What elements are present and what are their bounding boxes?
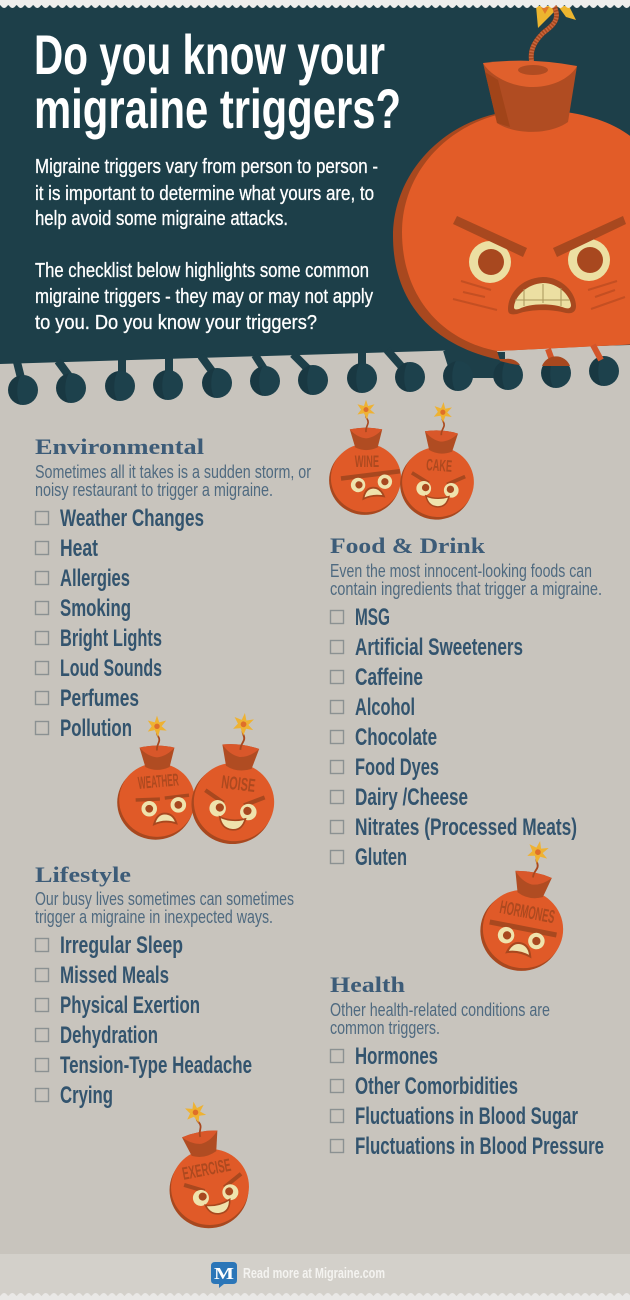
panel: food and drink: Alcohol xyxy=(355,694,415,721)
panel: lifestyle: trigger a migraine in inexpected ways. xyxy=(35,907,273,927)
panel: lifestyle: Lifestyle xyxy=(35,862,131,887)
header panel xyxy=(0,0,630,364)
bomb: cake: CAKE xyxy=(426,455,453,476)
title: migraine triggers? xyxy=(34,77,401,140)
bomb: hormones xyxy=(473,833,580,978)
panel: food and drink: Caffeine xyxy=(355,664,423,691)
panel: environmental: Perfumes xyxy=(60,685,139,712)
intro text: migraine triggers - they may or may not apply xyxy=(35,286,373,308)
panel: environmental: Environmental xyxy=(35,434,204,459)
panel: food and drink: Artificial Sweeteners xyxy=(355,634,523,661)
panel: food and drink xyxy=(330,533,602,871)
panel: food and drink: Food & Drink xyxy=(330,533,486,558)
panel: environmental: Heat xyxy=(60,535,98,562)
panel: health: Other health-related conditions are xyxy=(330,1000,550,1020)
panel: food and drink: Chocolate xyxy=(355,724,437,751)
panel: environmental: Loud Sounds xyxy=(60,655,162,682)
panel: lifestyle: Physical Exertion xyxy=(60,992,200,1019)
scalloped top edge xyxy=(0,0,630,9)
intro text: Migraine triggers vary from person to person - xyxy=(35,156,378,178)
panel: lifestyle: Irregular Sleep xyxy=(60,932,183,959)
panel: health: Health xyxy=(330,972,405,997)
bomb: noise: NOISE xyxy=(220,771,256,796)
panel: food and drink: Dairy /Cheese xyxy=(355,784,468,811)
bomb: weather xyxy=(117,716,195,840)
panel: lifestyle: Dehydration xyxy=(60,1022,158,1049)
mouth xyxy=(508,277,576,314)
bomb: hormones: HORMONES xyxy=(498,896,557,927)
title xyxy=(34,23,401,140)
panel: health: common triggers. xyxy=(330,1018,440,1038)
icon: Migraine.com logo xyxy=(211,1262,237,1288)
angry brows xyxy=(453,216,527,257)
big angry bomb xyxy=(393,6,630,366)
icon: fuse spark xyxy=(536,6,576,28)
cheek lines xyxy=(453,281,625,310)
panel: food and drink: MSG xyxy=(355,604,390,631)
title: Do you know your xyxy=(34,23,385,86)
intro text: to you. Do you know your triggers? xyxy=(35,312,317,334)
panel: lifestyle xyxy=(35,862,294,1109)
panel: health: Hormones xyxy=(355,1043,438,1070)
panel: lifestyle: Missed Meals xyxy=(60,962,169,989)
bomb: exercise xyxy=(153,1094,256,1235)
notebook binding rings xyxy=(8,345,619,405)
footer link text: Read more at Migraine.com xyxy=(243,1265,385,1282)
bomb: wine xyxy=(329,400,403,515)
panel: environmental xyxy=(35,434,311,742)
panel: environmental: Bright Lights xyxy=(60,625,162,652)
bomb: exercise: EXERCISE xyxy=(181,1155,233,1184)
intro text xyxy=(35,156,378,334)
panel: environmental: Sometimes all it takes is a sudden storm, or xyxy=(35,462,311,482)
panel: environmental: Allergies xyxy=(60,565,130,592)
panel: lifestyle: Crying xyxy=(60,1082,113,1109)
legs xyxy=(548,345,601,360)
intro text: The checklist below highlights some common xyxy=(35,260,369,282)
bomb: cake xyxy=(398,400,479,522)
eyes xyxy=(469,241,511,283)
panel: lifestyle: Our busy lives sometimes can sometimes xyxy=(35,889,294,909)
panel: environmental: Smoking xyxy=(60,595,131,622)
panel: environmental: noisy restaurant to trigger a migraine. xyxy=(35,480,273,500)
panel: food and drink: Gluten xyxy=(355,844,407,871)
footer xyxy=(0,1254,630,1300)
bomb: noise xyxy=(187,708,285,849)
panel: lifestyle: Tension-Type Headache xyxy=(60,1052,252,1079)
bomb: wine: WINE xyxy=(355,453,379,471)
panel: environmental: Weather Changes xyxy=(60,505,204,532)
panel: environmental: Pollution xyxy=(60,715,132,742)
intro text: help avoid some migraine attacks. xyxy=(35,208,288,230)
intro text: it is important to determine what yours are, to xyxy=(35,183,374,205)
panel: health: Other Comorbidities xyxy=(355,1073,518,1100)
bomb: weather: WEATHER xyxy=(137,769,180,793)
icon: Migraine.com logo: M xyxy=(214,1264,234,1283)
panel: health xyxy=(330,972,604,1160)
panel: food and drink: Food Dyes xyxy=(355,754,439,781)
